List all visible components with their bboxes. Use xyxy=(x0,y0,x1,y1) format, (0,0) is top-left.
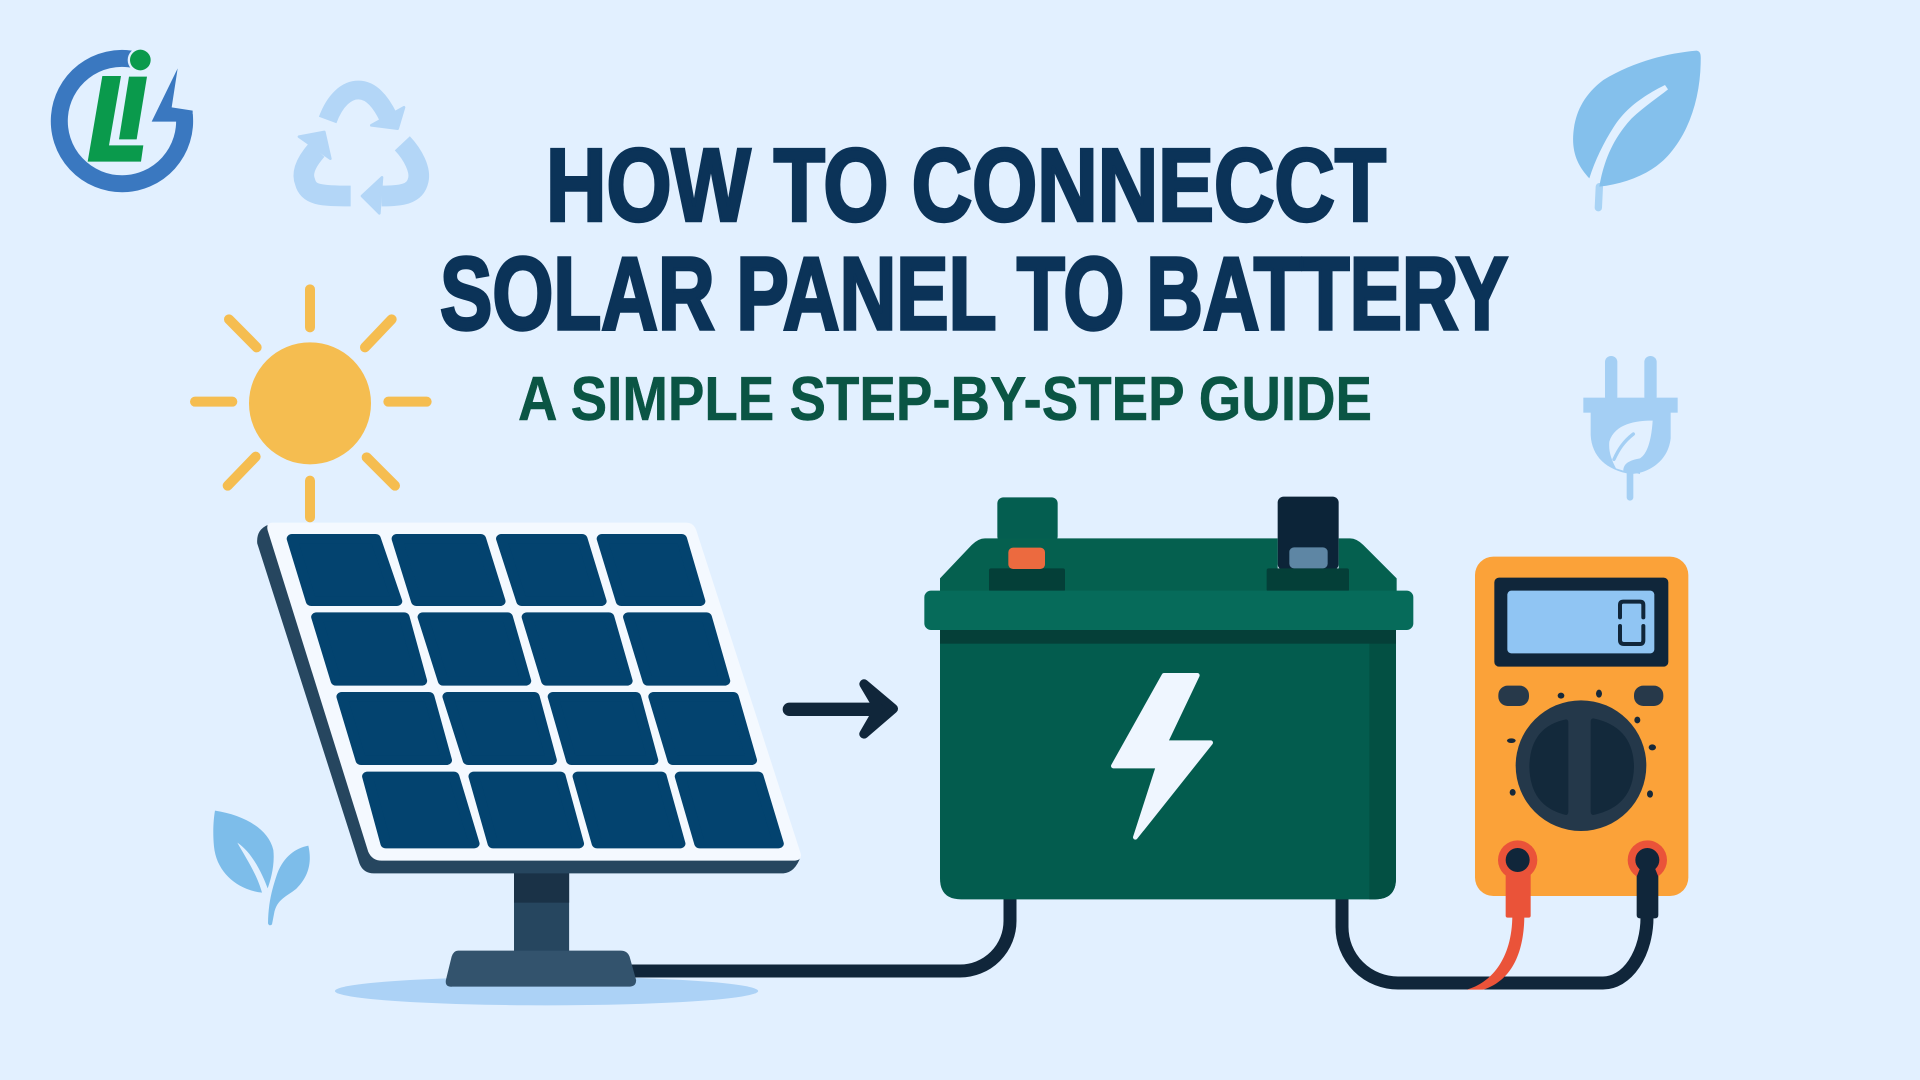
title: SOLAR PANEL TO BATTERY xyxy=(440,236,1508,351)
solar panel xyxy=(257,523,801,1005)
subtitle: A SIMPLE STEP-BY-STEP GUIDE xyxy=(518,365,1372,434)
battery lid xyxy=(940,538,1397,593)
icon: sun xyxy=(195,289,427,517)
multimeter xyxy=(1467,557,1688,990)
title xyxy=(440,128,1508,351)
negative cap xyxy=(1267,547,1349,592)
solar cells xyxy=(292,539,778,844)
icon: recycle xyxy=(299,90,419,213)
icon: sprout xyxy=(213,811,310,925)
red lead xyxy=(1467,840,1537,990)
cable: panel to battery xyxy=(620,895,1010,971)
positive cap xyxy=(989,548,1065,592)
dial knob xyxy=(1516,700,1646,831)
battery xyxy=(924,497,1413,899)
meter body xyxy=(1475,557,1688,896)
panel stand xyxy=(335,872,758,1005)
arrow xyxy=(783,684,893,734)
icon: eco plug xyxy=(1583,356,1678,497)
meter buttons xyxy=(1498,686,1663,706)
battery lip xyxy=(924,591,1413,630)
icon: leaf xyxy=(1573,51,1701,208)
dial marks xyxy=(1507,690,1656,798)
logo xyxy=(59,48,193,184)
cable: battery to meter xyxy=(1342,895,1647,983)
title: HOW TO CONNECCT xyxy=(546,128,1386,242)
negative terminal post xyxy=(1278,497,1339,570)
positive terminal xyxy=(997,497,1058,542)
panel frame xyxy=(257,523,801,873)
battery body xyxy=(940,628,1396,899)
meter screen xyxy=(1494,578,1668,667)
bolt xyxy=(1113,675,1211,837)
black lead xyxy=(1628,840,1667,918)
